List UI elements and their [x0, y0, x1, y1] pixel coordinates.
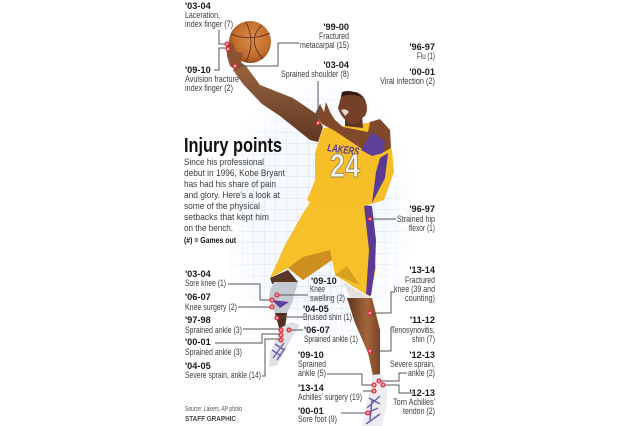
- labels: hand: index finger (2): [185, 83, 233, 93]
- labels: upper right: Sprained shoulder (8): [281, 69, 349, 79]
- leader lines: [214, 30, 413, 413]
- purple arm band: [361, 132, 385, 156]
- hand: [226, 43, 244, 70]
- labels: hand: '09-10: [185, 65, 211, 75]
- labels: upper right: '96-97: [409, 42, 435, 52]
- labels: lower right: [390, 265, 436, 416]
- labels: lower right: knee (39 and: [394, 284, 435, 294]
- labels: centre: Bruised shin (1): [303, 312, 352, 322]
- labels: centre: [298, 276, 362, 424]
- labels: lower left: '97-98: [185, 315, 211, 325]
- labels: lower right: Tenosynovitis,: [391, 325, 435, 335]
- labels: upper right: '96-97: [409, 204, 435, 214]
- background grid: [224, 84, 412, 346]
- labels: centre: Sprained: [298, 359, 326, 369]
- labels: lower right: tendon (2): [403, 406, 435, 416]
- source credit: [185, 404, 242, 423]
- labels: centre: swelling (2): [310, 293, 345, 303]
- labels: upper right: Fractured: [319, 31, 349, 41]
- intro text: setbacks that kept him: [184, 212, 269, 222]
- labels: lower left: Knee surgery (2): [185, 302, 237, 312]
- front sock and shoe: [362, 374, 387, 426]
- labels: lower right: Fractured: [405, 275, 435, 285]
- labels: upper right: '03-04: [323, 60, 350, 70]
- labels: lower left: '03-04: [185, 269, 212, 279]
- labels: centre: '09-10: [311, 276, 337, 286]
- labels: lower right: ankle (2): [408, 368, 435, 378]
- intro text: debut in 1996, Kobe Bryant: [184, 168, 286, 178]
- labels: lower left: '00-01: [185, 337, 211, 347]
- labels: centre: '04-05: [303, 304, 329, 314]
- labels: upper right: '99-00: [323, 22, 349, 32]
- labels: lower right: Severe sprain,: [390, 359, 435, 369]
- labels: upper right: [281, 22, 435, 233]
- white trim under shorts: [343, 282, 368, 300]
- source credit: STAFF GRAPHIC: [185, 414, 236, 423]
- number 24: 24: [330, 147, 361, 184]
- intro text: Since his professional: [184, 157, 264, 167]
- labels: centre: Sprained ankle (1): [304, 334, 358, 344]
- labels: lower right: '12-13: [409, 388, 435, 398]
- labels: lower right: shin (7): [412, 334, 435, 344]
- player photo illustration: [226, 21, 394, 426]
- intro text: has had his share of pain: [184, 179, 276, 189]
- jersey side stripe: [372, 153, 388, 203]
- injury markers: [225, 42, 385, 415]
- neck and head: [338, 91, 367, 128]
- labels: centre: Sore foot (9): [298, 414, 337, 424]
- labels: lower left: '04-05: [185, 361, 211, 371]
- labels: centre: '09-10: [298, 350, 324, 360]
- labels: centre: Achilles' surgery (19): [298, 392, 362, 402]
- labels: lower left: Sprained ankle (3): [185, 325, 242, 335]
- jersey: [307, 122, 394, 206]
- labels: lower left: '06-07: [185, 292, 211, 302]
- labels: upper right: Viral infection (2): [380, 76, 435, 86]
- labels: lower left: Sore knee (1): [185, 278, 226, 288]
- labels: upper right: Strained hip: [397, 214, 435, 224]
- basketball: [229, 21, 271, 63]
- intro text: some of the physical: [184, 201, 260, 211]
- intro text: [184, 157, 286, 233]
- labels: centre: '13-14: [298, 383, 325, 393]
- labels: hand: [185, 1, 239, 93]
- labels: upper right: flexor (1): [409, 223, 435, 233]
- shorts side stripe: [364, 205, 376, 296]
- labels: lower left: Severe sprain, ankle (14): [185, 370, 261, 380]
- labels: upper right: metacarpal (15): [300, 40, 349, 50]
- labels: lower right: '11-12: [410, 315, 435, 325]
- intro text: on the bench.: [184, 223, 233, 233]
- labels: upper right: '00-01: [409, 67, 435, 77]
- labels: lower right: '13-14: [409, 265, 436, 275]
- labels: hand: Laceration,: [185, 10, 220, 20]
- shorts: [270, 200, 376, 297]
- back shoe: [269, 322, 300, 367]
- labels: hand: Avulsion fracture: [185, 74, 239, 84]
- knee sleeve: [269, 282, 298, 313]
- labels: lower right: counting): [405, 293, 435, 303]
- labels: hand: index finger (7): [185, 19, 233, 29]
- lakers wordmark: LAKERS: [327, 142, 360, 158]
- source credit: Source: Lakers, AP photo: [185, 404, 242, 413]
- labels: hand: '03-04: [185, 1, 212, 11]
- front leg: [347, 298, 380, 376]
- labels: centre: Knee: [310, 284, 325, 294]
- labels: centre: '06-07: [304, 325, 330, 335]
- supporting arm: [315, 102, 391, 152]
- title: Injury points: [184, 135, 282, 157]
- back shin: [275, 313, 287, 328]
- labels: lower right: '12-13: [409, 350, 435, 360]
- labels: centre: ankle (5): [298, 368, 326, 378]
- intro text: and glory. Here's a look at: [184, 190, 281, 200]
- labels: upper right: Flu (1): [417, 51, 435, 61]
- games out key: (#) = Games out: [184, 236, 236, 245]
- labels: centre: '00-01: [298, 406, 324, 416]
- labels: lower left: Sprained ankle (3): [185, 347, 242, 357]
- shorts shadow: [288, 250, 332, 280]
- labels: lower right: Torn Achilles': [393, 397, 435, 407]
- labels: lower left: [185, 269, 261, 380]
- raised arm: [233, 60, 323, 142]
- back thigh: [270, 270, 298, 284]
